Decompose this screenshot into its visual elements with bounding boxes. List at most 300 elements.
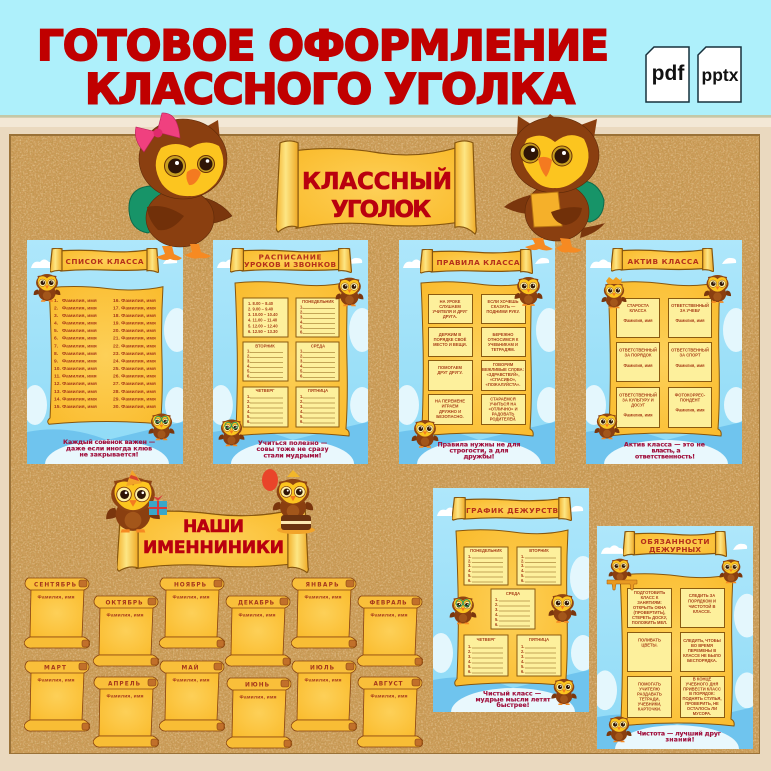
box: вторник: 3. xyxy=(521,563,524,568)
name list: 11. Фамилия, имя xyxy=(54,374,97,380)
rules boxes: БЕЗОПАСНО. xyxy=(436,414,464,419)
duty boxes: ПОРЯДКОМ И xyxy=(688,598,716,604)
duty boxes: УЧИТЕЛЮ xyxy=(639,686,661,692)
box: пятница: 2. xyxy=(521,649,524,654)
owl: top right xyxy=(719,559,743,583)
duty boxes: КАРТОЧКИ. xyxy=(638,706,661,712)
box: вторник: 4. xyxy=(521,568,524,573)
name list: 26. Фамилия, имя xyxy=(113,374,156,380)
motto xyxy=(438,442,521,460)
duty boxes: СЛЕДИТЬ, ЧТОБЫ xyxy=(683,638,721,643)
box: понедельник xyxy=(464,547,508,585)
duty boxes: ПОЛОЖИТЬ МЕЛ. xyxy=(632,620,667,625)
card: июль: ИЮЛЬ xyxy=(310,666,335,672)
poster: список класса xyxy=(23,240,190,488)
name list: 8. xyxy=(54,351,59,357)
card: октябрь: Фамилия, имя xyxy=(106,612,144,618)
card: июнь: ИЮНЬ xyxy=(245,682,270,688)
motto: дружбы! xyxy=(464,452,494,460)
box: среда: 4. xyxy=(300,364,303,368)
box: понедельник: 6. xyxy=(468,578,471,583)
rules boxes: ДРУЖНО И xyxy=(439,409,461,414)
card: сентябрь: СЕНТЯБРЬ xyxy=(34,582,77,588)
box: понедельник: 5. xyxy=(468,573,471,578)
name list xyxy=(54,298,156,410)
name list: 21. Фамилия, имя xyxy=(113,336,156,342)
box: пятница: ПЯТНИЦА xyxy=(529,637,549,642)
header background xyxy=(0,0,771,116)
parchment xyxy=(455,530,569,686)
box: звонки: 1. 8.00 – 8.40 xyxy=(248,301,274,306)
card: январь xyxy=(291,578,357,648)
duty boxes: БЕСПОРЯДКА. xyxy=(687,658,717,663)
role boxes: ЗА УЧЕБУ xyxy=(680,308,701,313)
role boxes: Фамилия, имя xyxy=(675,318,705,323)
box: четверг: ЧЕТВЕРГ xyxy=(477,637,496,642)
banner: УРОКОВ И ЗВОНКОВ xyxy=(244,260,336,269)
motto xyxy=(624,442,705,460)
birthday scroll: ИМЕННИНИКИ xyxy=(143,538,284,558)
banner: СПИСОК КЛАССА xyxy=(66,257,144,266)
role boxes: ЗА СПОРТ xyxy=(680,352,701,358)
role boxes: КЛАССА xyxy=(630,308,647,313)
name list: 10. Фамилия, имя xyxy=(54,366,97,372)
name list: Фамилия, имя xyxy=(62,343,97,349)
title: КЛАССНОГО УГОЛКА xyxy=(85,64,575,114)
rules boxes: ОТНОСИМСЯ К xyxy=(488,337,519,342)
box: пятница: ПЯТНИЦА xyxy=(308,388,328,393)
owl: top left xyxy=(34,274,60,302)
owl: crown xyxy=(602,277,626,308)
duty boxes: ПОДГОТОВИТЬ xyxy=(634,590,665,595)
role boxes: Фамилия, имя xyxy=(623,318,653,323)
role boxes: ДОСУГ xyxy=(631,402,646,408)
motto: не закрывается! xyxy=(80,452,138,458)
card: октябрь: ОКТЯБРЬ xyxy=(106,600,143,606)
box: понедельник: 2. xyxy=(300,310,303,314)
name list: 16. Фамилия, имя xyxy=(113,298,156,304)
duty boxes: ЗАНЯТИЯМ: xyxy=(637,600,662,605)
duty boxes: ПОДНЯТЬ СТУЛЬЯ, xyxy=(683,696,721,701)
poster: обязанности дежурных xyxy=(593,526,760,771)
duty boxes: ПОЛИВАТЬ xyxy=(638,638,661,642)
motto xyxy=(476,690,551,709)
box: четверг xyxy=(243,387,288,427)
role boxes: ОТВЕТСТВЕННЫЙ xyxy=(671,303,709,308)
role boxes: ОТВЕТСТВЕННЫЙ xyxy=(619,348,657,352)
box: четверг: ЧЕТВЕРГ xyxy=(256,388,275,393)
name list: 30. Фамилия, имя xyxy=(113,404,156,410)
box: вторник: 4. xyxy=(247,364,250,368)
box: среда: 5. xyxy=(495,617,498,622)
duty boxes: КЛАССЕ. xyxy=(693,609,711,614)
poster: правила класса xyxy=(395,240,562,488)
box: четверг: 2. xyxy=(247,399,250,404)
card: март: Фамилия, имя xyxy=(38,678,75,684)
name list: 17. Фамилия, имя xyxy=(113,306,156,312)
rules boxes: РАДОВАТЬ xyxy=(492,412,514,416)
motto: Чистый класс — xyxy=(483,690,541,698)
parchment xyxy=(234,282,349,436)
box: среда: СРЕДА xyxy=(506,591,520,596)
duty boxes: РАЗДАВАТЬ xyxy=(637,692,662,696)
motto: Учиться полезно — xyxy=(258,440,327,447)
motto: ответственность! xyxy=(635,454,695,460)
role boxes: Фамилия, имя xyxy=(675,363,705,368)
box: понедельник xyxy=(296,298,339,337)
banner: РАСПИСАНИЕ xyxy=(258,252,322,262)
name list: 24. Фамилия, имя xyxy=(113,358,156,364)
name list: Фамилия, имя xyxy=(62,306,97,312)
parchment xyxy=(48,287,164,424)
role boxes: ПОНДЕНТ xyxy=(680,398,701,402)
box: среда: 5. xyxy=(300,368,303,374)
duty boxes: УЧЕБНИКИ, xyxy=(638,702,661,706)
owl: birthday balloon and cake xyxy=(262,469,315,534)
box: среда: 4. xyxy=(495,612,498,617)
name list: 9. xyxy=(54,358,59,364)
box: вторник: ВТОРНИК xyxy=(529,548,549,553)
box: понедельник: ПОНЕДЕЛЬНИК xyxy=(470,548,502,553)
rules boxes: УЧЕБНИКАМ И xyxy=(488,342,518,347)
rules boxes: «ПОЖАЛУЙСТА». xyxy=(486,382,520,387)
rules boxes: НА УРОКЕ xyxy=(440,299,461,304)
name list: Фамилия, имя xyxy=(62,320,97,326)
card: сентябрь: Фамилия, имя xyxy=(38,594,75,600)
card: сентябрь xyxy=(24,578,90,648)
box: вторник: 5. xyxy=(521,573,524,578)
rules boxes: УЧИТЕЛЯ И ДРУГ xyxy=(432,309,468,314)
rules boxes: ТЕТРАДЯМ. xyxy=(491,347,515,352)
owl: top right xyxy=(336,278,363,306)
name list: Фамилия, имя xyxy=(62,336,97,342)
box: пятница: 5. xyxy=(521,664,524,669)
name list: 13. Фамилия, имя xyxy=(54,389,97,395)
owl: girl with bow xyxy=(129,113,232,260)
box: вторник: 5. xyxy=(247,368,250,374)
rules boxes: СЛУШАЕМ xyxy=(439,304,461,309)
name list: 4. xyxy=(54,320,59,326)
duty boxes: ПЕРЕМЕНЫ В xyxy=(688,648,716,653)
duty boxes: КЛАСС К xyxy=(641,595,659,600)
card: август xyxy=(357,677,423,747)
card: октябрь xyxy=(93,596,159,666)
role boxes: СТАРОСТА xyxy=(627,303,649,308)
name list: Фамилия, имя xyxy=(62,298,97,304)
poster: график дежурств xyxy=(429,488,596,736)
box: пятница xyxy=(296,387,339,427)
duty boxes: СТЕРЕТЬ ДОСКУ, xyxy=(632,615,667,620)
box: понедельник: 4. xyxy=(300,320,303,324)
box: вторник: 6. xyxy=(521,578,524,583)
duty boxes: ТЕТРАДИ, xyxy=(639,696,660,702)
duty boxes xyxy=(628,588,724,718)
rules boxes: РОДИТЕЛЕЙ. xyxy=(490,416,516,422)
box: четверг: 3. xyxy=(468,654,471,659)
motto: стали мудрыми! xyxy=(264,452,322,460)
motto xyxy=(63,438,155,458)
banner xyxy=(230,248,352,272)
rules boxes: ПОМОГАЕМ xyxy=(438,365,463,370)
rules boxes: «СПАСИБО», xyxy=(490,377,516,382)
duty boxes: ЦВЕТЫ. xyxy=(641,642,658,648)
box: пятница: 1. xyxy=(300,394,303,399)
card: апрель: АПРЕЛЬ xyxy=(108,682,141,688)
box: вторник xyxy=(517,547,561,585)
rules boxes: МЕСТО И ВЕЩИ. xyxy=(433,342,467,347)
motto: совы тоже не сразу xyxy=(256,446,328,453)
box: пятница xyxy=(517,635,561,676)
box: вторник: 2. xyxy=(247,354,250,358)
name list: 29. Фамилия, имя xyxy=(113,396,156,402)
name list: 2. xyxy=(54,306,59,312)
name list: 6. xyxy=(54,336,59,342)
box: вторник: 1. xyxy=(521,554,524,559)
card: февраль xyxy=(357,596,423,666)
box: среда: 2. xyxy=(300,354,303,358)
name list: 5. xyxy=(54,328,59,334)
box: четверг: 1. xyxy=(468,644,471,649)
name list: 23. Фамилия, имя xyxy=(113,351,156,357)
rules boxes: УЧИТЬСЯ НА xyxy=(490,402,516,406)
box: среда: 3. xyxy=(495,607,498,612)
box: пятница: 5. xyxy=(300,414,303,419)
role boxes: ОТВЕТСТВЕННЫЙ xyxy=(619,392,657,398)
name list: 28. Фамилия, имя xyxy=(113,389,156,395)
box: вторник: ВТОРНИК xyxy=(255,344,275,348)
name list: 3. xyxy=(54,313,59,319)
duty boxes: ОТКРЫТЬ ОКНА xyxy=(633,605,666,610)
name list: 27. Фамилия, имя xyxy=(113,381,156,387)
box: вторник: 6. xyxy=(247,374,250,378)
card: январь: ЯНВАРЬ xyxy=(306,582,339,588)
rules boxes: СТАРАЕМСЯ xyxy=(490,396,516,402)
box: звонки xyxy=(243,298,288,337)
box: понедельник: ПОНЕДЕЛЬНИК xyxy=(302,299,334,304)
motto xyxy=(637,730,722,744)
birthday scroll: НАШИ xyxy=(183,517,244,537)
owl: bottom left xyxy=(607,717,631,742)
motto: строгости, а для xyxy=(450,448,509,454)
banner: ОБЯЗАННОСТИ xyxy=(640,537,710,546)
box: среда: СРЕДА xyxy=(311,344,325,348)
rules boxes xyxy=(428,294,526,424)
owl: top right xyxy=(515,277,542,306)
owl: writing xyxy=(704,275,731,303)
rules boxes: ДРУГ ДРУГУ. xyxy=(437,370,463,375)
box: пятница: 6. xyxy=(300,419,303,424)
card: ноябрь: НОЯБРЬ xyxy=(174,582,207,588)
box: понедельник: 6. xyxy=(300,330,303,334)
motto: даже если иногда клюв xyxy=(66,446,152,452)
motto: знаний! xyxy=(666,736,694,744)
duty boxes: УЧЕБНОГО ДНЯ xyxy=(686,681,718,686)
banner: АКТИВ КЛАССА xyxy=(628,257,699,266)
role boxes: Фамилия, имя xyxy=(623,412,653,418)
role boxes: Фамилия, имя xyxy=(675,408,705,412)
role boxes: ФОТОКОРРЕС- xyxy=(675,392,706,398)
month cards xyxy=(24,578,423,748)
box: пятница: 2. xyxy=(300,399,303,404)
box: понедельник: 3. xyxy=(468,563,471,568)
duty boxes: В ПОРЯДОК: xyxy=(689,691,715,696)
owl: flower xyxy=(549,594,576,623)
card: апрель: Фамилия, имя xyxy=(106,694,144,700)
card: июнь: Фамилия, имя xyxy=(240,694,277,700)
box: среда: 2. xyxy=(495,602,498,607)
card: ноябрь: Фамилия, имя xyxy=(172,594,210,600)
banner xyxy=(623,531,727,556)
banner: ДЕЖУРНЫХ xyxy=(649,545,701,554)
card: февраль: Фамилия, имя xyxy=(370,612,408,618)
name list: 1. xyxy=(54,298,59,304)
parchment xyxy=(619,574,734,726)
box: пятница: 1. xyxy=(521,644,524,649)
duty boxes: ЧИСТОТОЙ В xyxy=(689,604,715,609)
card: август: АВГУСТ xyxy=(374,682,403,688)
icon: pdf file xyxy=(646,47,689,102)
name list: Фамилия, имя xyxy=(62,328,97,334)
owl: bottom left xyxy=(595,414,619,439)
birthday scroll xyxy=(117,506,308,573)
rules boxes: НА ПЕРЕМЕНЕ xyxy=(435,398,465,404)
rules boxes: «ЗДРАВСТВУЙ», xyxy=(487,372,519,377)
owl: bottom right xyxy=(551,679,577,705)
rules boxes: ИГРАЕМ xyxy=(442,404,459,408)
banner xyxy=(50,248,159,272)
card: май xyxy=(159,661,225,731)
rules boxes: ДРУГА. xyxy=(443,314,457,319)
box: понедельник: 3. xyxy=(300,314,303,320)
card: май: Фамилия, имя xyxy=(172,678,210,684)
owl: boy with book xyxy=(504,114,605,253)
box: понедельник: 1. xyxy=(300,304,303,310)
parchment xyxy=(607,282,721,436)
rules boxes: ДЕРЖИМ В xyxy=(439,332,461,337)
card: январь: Фамилия, имя xyxy=(304,594,342,600)
card: март xyxy=(24,661,90,731)
box: четверг: 5. xyxy=(247,414,250,419)
card: март: МАРТ xyxy=(44,666,66,672)
motto: Чистота — лучший друг xyxy=(637,730,722,738)
box: четверг: 2. xyxy=(468,649,471,654)
card: июнь xyxy=(226,678,292,748)
rules boxes: ГОВОРИМ xyxy=(493,362,514,367)
card: июль xyxy=(291,661,357,731)
duty boxes: ПРИВЕСТИ КЛАСС xyxy=(683,686,721,691)
box: понедельник: 4. xyxy=(468,568,471,573)
box: вторник: 1. xyxy=(247,348,250,354)
owl: glasses xyxy=(219,420,244,446)
duty boxes: МУСОРА. xyxy=(693,711,711,716)
box: вторник: 2. xyxy=(521,558,524,564)
name list: 12. Фамилия, имя xyxy=(54,381,97,387)
box: понедельник: 2. xyxy=(468,558,471,564)
box: среда: 6. xyxy=(300,374,303,378)
motto: Правила нужны не для xyxy=(438,442,521,448)
box: звонки: 6. 12.50 – 13.30 xyxy=(248,329,278,334)
duty boxes: ПОМОГАТЬ xyxy=(638,682,661,686)
icon: pptx file xyxy=(698,47,741,102)
duty boxes: (ПРОВЕРТИТЬ), xyxy=(634,610,665,615)
box: звонки: 2. 9.00 – 9.40 xyxy=(248,306,274,312)
name list: 15. Фамилия, имя xyxy=(54,404,97,410)
box: четверг: 4. xyxy=(247,409,250,414)
box: звонки: 5. 12.00 – 12.40 xyxy=(248,323,278,328)
motto: быстрее! xyxy=(496,701,530,709)
owl: bottom left xyxy=(412,420,438,448)
box: четверг: 6. xyxy=(468,669,471,674)
card: июль: Фамилия, имя xyxy=(304,678,342,684)
banner: ПРАВИЛА КЛАССА xyxy=(436,258,520,267)
box: вторник xyxy=(243,342,288,381)
box: четверг: 4. xyxy=(468,659,471,664)
motto: власть, а xyxy=(652,448,680,454)
owl: glasses xyxy=(149,414,174,440)
banner xyxy=(420,249,533,274)
name list: Фамилия, имя xyxy=(62,313,97,319)
main scroll: классный уголок xyxy=(276,141,476,234)
banner: ГРАФИК ДЕЖУРСТВ xyxy=(466,506,558,515)
poster: расписание xyxy=(209,240,375,488)
box: четверг: 5. xyxy=(468,664,471,669)
rules boxes: ЕСЛИ ХОЧЕШЬ xyxy=(487,299,519,304)
parchment xyxy=(420,282,533,436)
rules boxes: БЕРЕЖНО xyxy=(493,332,514,337)
card: ноябрь xyxy=(159,578,225,648)
owl: glasses xyxy=(450,597,476,624)
box: среда: 1. xyxy=(495,597,498,602)
card: декабрь xyxy=(225,596,291,666)
role boxes: ЗА КУЛЬТУРУ И xyxy=(622,398,654,402)
name list: Фамилия, имя xyxy=(62,358,97,364)
poster: актив класса xyxy=(582,240,749,488)
name list: 14. Фамилия, имя xyxy=(54,396,97,402)
rules boxes: «ОТЛИЧНО» И xyxy=(488,406,518,412)
icon: pptx file: pptx xyxy=(702,65,739,85)
icon: pdf file: pdf xyxy=(652,62,685,85)
main scroll: классный уголок: УГОЛОК xyxy=(331,197,431,223)
box: звонки: 3. 10.00 – 10.40 xyxy=(248,312,278,317)
box: пятница: 3. xyxy=(300,404,303,409)
card: декабрь: ДЕКАБРЬ xyxy=(238,600,275,606)
box: пятница: 3. xyxy=(521,654,524,659)
card: май: МАЙ xyxy=(182,664,199,672)
title: ГОТОВОЕ ОФОРМЛЕНИЕ xyxy=(37,21,609,70)
duty boxes: КЛАССЕ НЕ БЫЛО xyxy=(683,653,722,658)
motto: Актив класса — это не xyxy=(624,442,705,448)
box: четверг: 3. xyxy=(247,404,250,409)
box: четверг xyxy=(464,635,508,676)
box: среда: 3. xyxy=(300,358,303,364)
name list: 20. Фамилия, имя xyxy=(113,328,156,334)
box: понедельник: 1. xyxy=(468,554,471,559)
role boxes: Фамилия, имя xyxy=(623,363,653,368)
box: четверг: 6. xyxy=(247,419,250,424)
banner xyxy=(452,497,572,521)
box: пятница: 4. xyxy=(300,409,303,414)
owl: desk xyxy=(607,559,637,590)
card: апрель xyxy=(93,677,159,747)
motto: Каждый совёнок важен — xyxy=(63,438,155,446)
box: понедельник: 5. xyxy=(300,324,303,330)
role boxes xyxy=(616,298,712,428)
box: среда xyxy=(296,342,339,381)
title xyxy=(37,21,609,114)
role boxes: ЗА ПОРЯДОК xyxy=(625,352,652,358)
name list: 22. Фамилия, имя xyxy=(113,343,156,349)
rules boxes: ПОДНИМИ РУКУ. xyxy=(486,309,520,314)
